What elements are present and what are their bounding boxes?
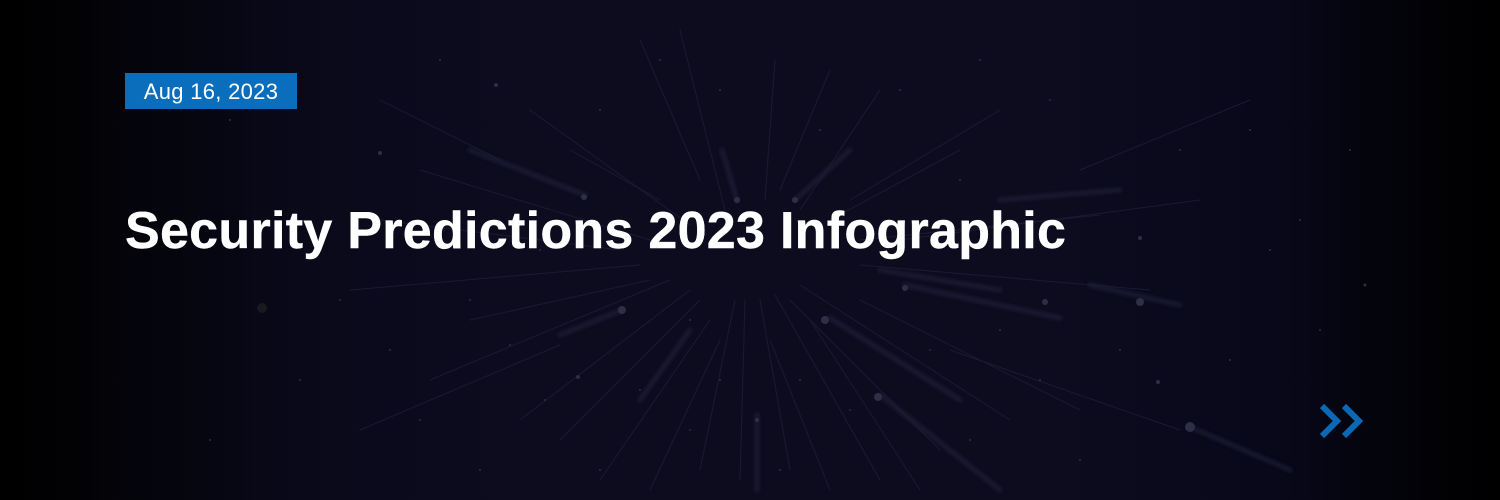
date badge: Aug 16, 2023 xyxy=(144,79,278,104)
date badge xyxy=(125,73,297,109)
title: Security Predictions 2023 Infographic xyxy=(125,202,1066,260)
icon: double chevron arrow xyxy=(1320,404,1364,438)
